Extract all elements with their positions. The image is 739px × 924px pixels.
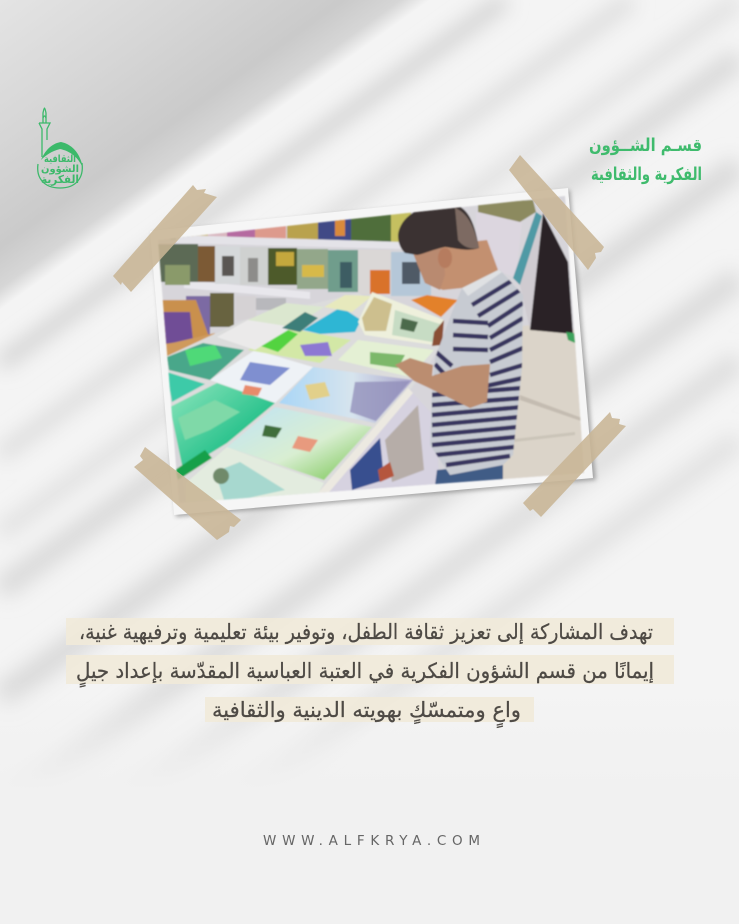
- hair: [398, 203, 479, 255]
- tape: bottom left: [134, 447, 241, 540]
- bookshelf upper row: [197, 212, 412, 243]
- logo: minaret and dome: الشؤون: [41, 164, 79, 175]
- fade haircut: [455, 208, 479, 249]
- text line 3: واعٍ ومتمسّكٍ بهويته الدينية والثقافية: [212, 698, 521, 729]
- department name line 1: قسـم الشــؤون: [589, 136, 702, 156]
- highlight bar line 3: [205, 697, 534, 722]
- body text block: [66, 618, 674, 729]
- department name: [589, 136, 702, 185]
- tape: top left: [113, 185, 217, 292]
- logo: minaret and dome: [38, 108, 83, 188]
- tape: bottom right: [523, 412, 626, 517]
- shirt collar: [462, 268, 502, 296]
- display table top: [166, 324, 235, 358]
- tape: top right: [509, 155, 604, 270]
- white paper: [150, 188, 593, 515]
- table front panel: [320, 388, 424, 492]
- neck and face: [438, 239, 498, 291]
- striped t-shirt: [430, 272, 524, 476]
- arm and hand: [395, 358, 490, 408]
- photo: boy reading books at a book fair: [150, 190, 595, 510]
- lower fade: [0, 680, 739, 790]
- shelf boards: [176, 235, 404, 299]
- wooden stand: [162, 300, 215, 362]
- logo: minaret and dome: الثقافية: [44, 154, 76, 165]
- photo print: [150, 188, 596, 517]
- jeans: [435, 463, 503, 485]
- lower shelf items: [186, 293, 286, 336]
- highlight bar line 2: [66, 655, 674, 684]
- picture books on the table: [167, 295, 434, 505]
- ear: [438, 248, 452, 268]
- boy: [395, 203, 530, 485]
- logo: minaret and dome: الفكرية: [41, 173, 79, 186]
- website url: WWW.ALFKRYA.COM: [263, 833, 480, 849]
- bookshelf lower row: [158, 244, 431, 296]
- shaded cheek: [415, 250, 444, 290]
- floor and door background: [477, 199, 584, 479]
- text line 1: تهدف المشاركة إلى تعزيز ثقافة الطفل، وتوفير بيئة تعليمية وترفيهية غنية،: [79, 620, 653, 645]
- print shadow: [152, 190, 596, 517]
- department name line 2: الفكرية والثقافية: [591, 165, 702, 185]
- text line 2: إيمانًا من قسم الشؤون الفكرية في العتبة العباسية المقدّسة بإعداد جيلٍ: [76, 659, 654, 689]
- open book held by the boy: [358, 292, 458, 346]
- highlight bar line 1: [66, 618, 674, 645]
